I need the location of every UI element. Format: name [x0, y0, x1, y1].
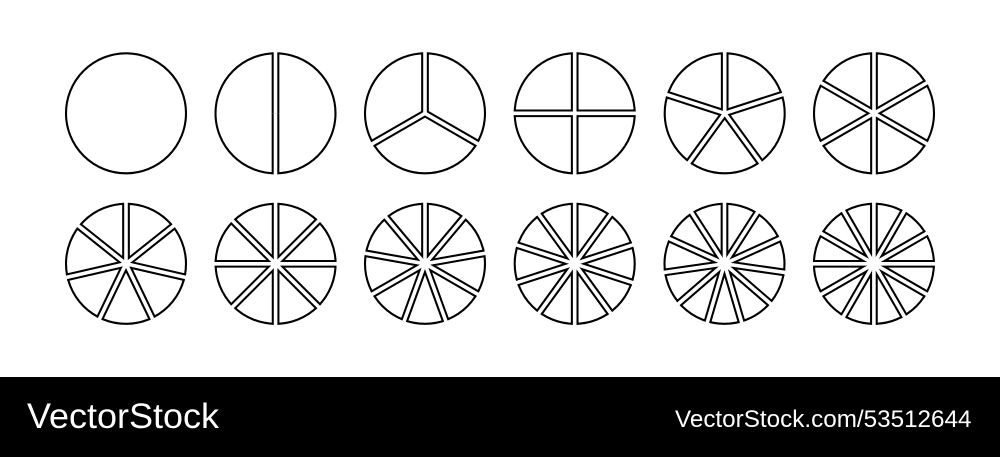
pie: 3 segments	[365, 47, 485, 173]
pie: 8 segments	[210, 198, 342, 330]
pie: 12 segments	[808, 198, 940, 330]
pie: 7 segments	[62, 198, 190, 324]
pie: 10 segments	[512, 198, 637, 330]
pie: whole circle	[66, 53, 186, 173]
pie: 11 segments	[659, 198, 790, 327]
pie: 6 segments	[814, 47, 934, 179]
pie: 4 segments	[509, 47, 641, 179]
footer image id text: VectorStock.com/53512644	[675, 406, 972, 433]
footer bar	[0, 377, 1000, 457]
pie: 2 segments	[216, 47, 336, 179]
footer logo text: VectorStock	[27, 396, 219, 436]
pie: 9 segments	[360, 198, 490, 326]
pie: 5 segments	[662, 47, 787, 173]
